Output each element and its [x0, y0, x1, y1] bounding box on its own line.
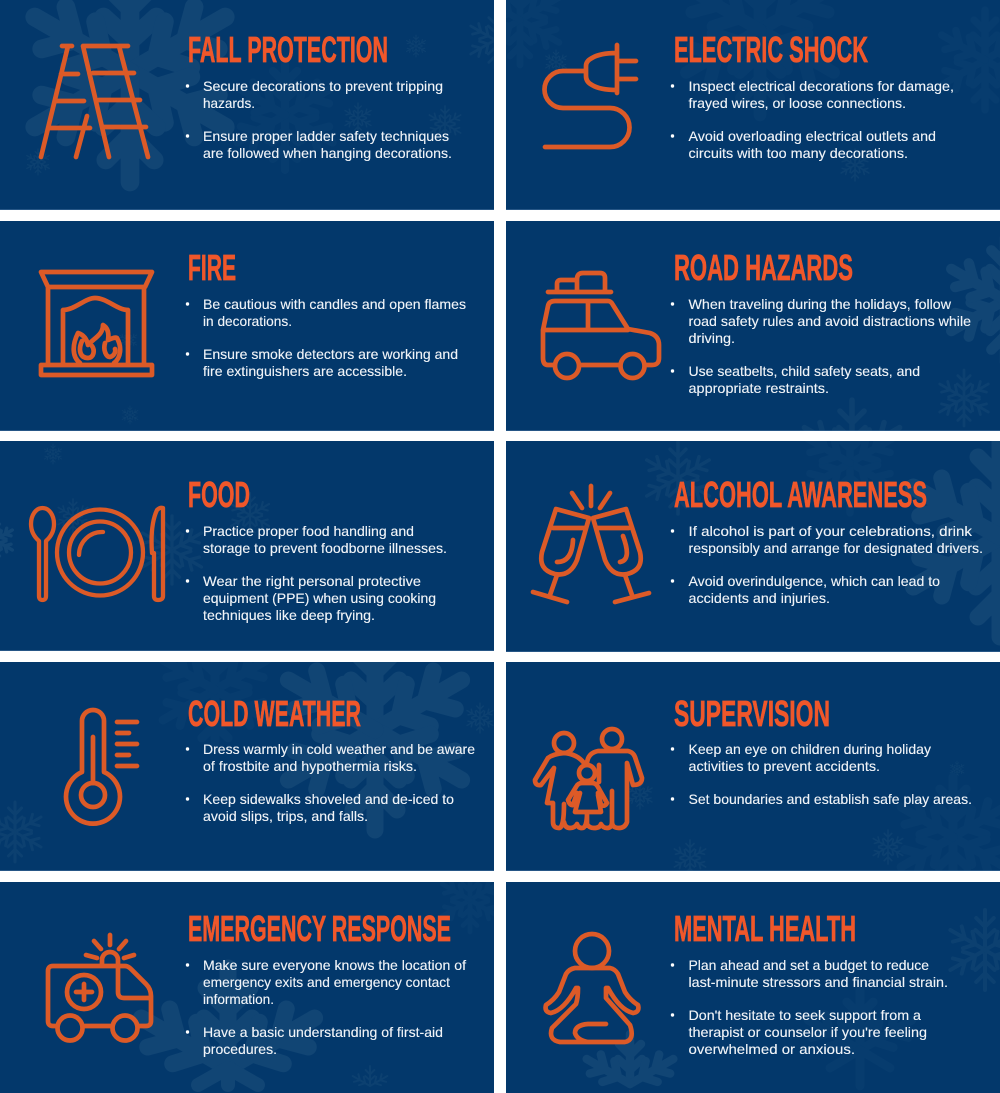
- panel: fall protection: [0, 0, 523, 210]
- text: supervision tips: Keep an eye on children during holiday: [688, 742, 931, 757]
- text: road hazards tips: Use seatbelts, child safety seats, and: [688, 364, 920, 379]
- panel: cold weather: [0, 662, 494, 871]
- heading: electric shock: ELECTRIC SHOCK: [674, 29, 868, 70]
- text: alcohol awareness tips: accidents and injuries.: [688, 591, 830, 606]
- text: electric shock tips: [671, 79, 954, 161]
- text: road hazards tips: driving.: [688, 331, 735, 346]
- text: fire tips: Be cautious with candles and open flames: [203, 297, 466, 312]
- text: electric shock tips: frayed wires, or loose connections.: [688, 96, 906, 111]
- text: mental health tips: Plan ahead and set a budget to reduce: [688, 958, 929, 973]
- panel: food: [0, 441, 494, 651]
- text: emergency response tips: Make sure everyone knows the location of: [203, 958, 466, 973]
- text: food tips: [186, 524, 447, 623]
- icon: family: [535, 729, 642, 828]
- panel: fire: [0, 221, 494, 431]
- text: fall protection tips: Ensure proper ladder safety techniques: [203, 129, 449, 144]
- text: emergency response tips: emergency exits and emergency contact: [203, 975, 450, 990]
- icon: thermometer: [66, 710, 137, 824]
- text: cold weather tips: Dress warmly in cold weather and be aware: [203, 742, 475, 757]
- text: fire tips: in decorations.: [203, 314, 292, 329]
- panel: alcohol awareness: [506, 441, 1000, 652]
- icon: plug and cord: [544, 45, 636, 147]
- panel: road hazards: [506, 221, 1000, 431]
- text: fall protection tips: [186, 79, 452, 161]
- icon: car with luggage: [543, 273, 659, 378]
- text: road hazards tips: appropriate restraints.: [688, 381, 829, 396]
- text: food tips: Practice proper food handling and: [203, 524, 414, 539]
- heading: cold weather: COLD WEATHER: [188, 693, 361, 734]
- text: road hazards tips: road safety rules and avoid distractions while: [688, 314, 971, 329]
- icon: meditating person: [546, 934, 638, 1042]
- text: fire tips: fire extinguishers are accessible.: [203, 364, 407, 379]
- panel: emergency response: [0, 868, 502, 1093]
- panel: electric shock: [476, 0, 1000, 210]
- text: supervision tips: [671, 742, 972, 807]
- text: emergency response tips: procedures.: [203, 1042, 277, 1057]
- text: alcohol awareness tips: [671, 524, 983, 606]
- text: road hazards tips: [671, 297, 971, 396]
- text: cold weather tips: of frostbite and hypothermia risks.: [203, 759, 417, 774]
- icon: clinking glasses: [533, 486, 649, 602]
- text: food tips: equipment (PPE) when using cooking: [203, 591, 436, 606]
- text: fall protection tips: hazards.: [203, 96, 255, 111]
- text: supervision tips: activities to prevent accidents.: [688, 759, 880, 774]
- icon: ambulance: [48, 935, 151, 1040]
- text: food tips: techniques like deep frying.: [203, 608, 375, 623]
- text: mental health tips: last-minute stressors and financial strain.: [688, 975, 948, 990]
- text: cold weather tips: avoid slips, trips, and falls.: [203, 809, 368, 824]
- heading: emergency response: EMERGENCY RESPONSE: [188, 908, 451, 949]
- text: alcohol awareness tips: If alcohol is part of your celebrations, drink: [688, 524, 972, 539]
- text: supervision tips: Set boundaries and establish safe play areas.: [688, 792, 972, 807]
- text: mental health tips: overwhelmed or anxious.: [688, 1042, 855, 1057]
- icon: fireplace: [41, 272, 152, 375]
- text: emergency response tips: [186, 958, 466, 1057]
- icon: ladder: [41, 46, 148, 157]
- heading: road hazards: ROAD HAZARDS: [674, 247, 853, 288]
- text: alcohol awareness tips: Avoid overindulgence, which can lead to: [688, 574, 940, 589]
- panel: mental health: [506, 882, 1000, 1093]
- text: food tips: Wear the right personal protective: [203, 574, 421, 589]
- text: emergency response tips: information.: [203, 992, 274, 1007]
- text: electric shock tips: circuits with too many decorations.: [688, 146, 908, 161]
- heading: mental health: MENTAL HEALTH: [674, 908, 856, 949]
- text: road hazards tips: When traveling during the holidays, follow: [688, 297, 951, 312]
- heading: fire: FIRE: [188, 247, 236, 288]
- text: electric shock tips: Inspect electrical decorations for damage,: [688, 79, 954, 94]
- panel: supervision: [506, 662, 1000, 871]
- text: cold weather tips: [186, 742, 475, 824]
- text: electric shock tips: Avoid overloading electrical outlets and: [688, 129, 936, 144]
- heading: food: FOOD: [188, 474, 250, 515]
- text: mental health tips: Don't hesitate to seek support from a: [688, 1008, 921, 1023]
- text: food tips: storage to prevent foodborne illnesses.: [203, 541, 447, 556]
- text: mental health tips: [671, 958, 948, 1057]
- text: cold weather tips: Keep sidewalks shoveled and de-iced to: [203, 792, 454, 807]
- text: fall protection tips: are followed when hanging decorations.: [203, 146, 452, 161]
- icon: plate and cutlery: [31, 508, 163, 600]
- text: fire tips: Ensure smoke detectors are working and: [203, 347, 458, 362]
- heading: fall protection: FALL PROTECTION: [188, 29, 388, 70]
- text: alcohol awareness tips: responsibly and arrange for designated drivers.: [688, 541, 983, 556]
- text: fire tips: [186, 297, 466, 379]
- text: fall protection tips: Secure decorations to prevent tripping: [203, 79, 443, 94]
- text: emergency response tips: Have a basic understanding of first-aid: [203, 1025, 443, 1040]
- heading: supervision: SUPERVISION: [674, 693, 830, 734]
- text: mental health tips: therapist or counselor if you're feeling: [688, 1025, 927, 1040]
